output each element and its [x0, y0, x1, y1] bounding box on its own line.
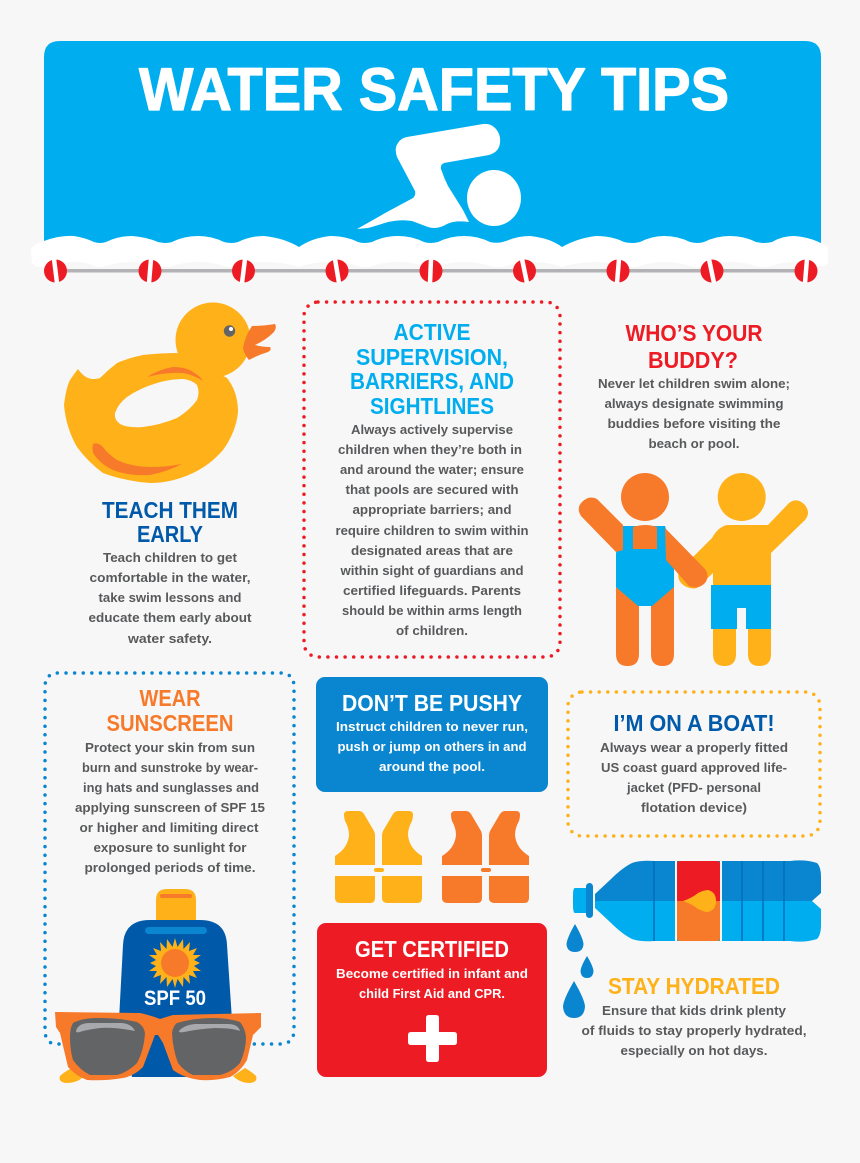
- icon: water drops: [563, 924, 594, 1018]
- header banner: [44, 41, 821, 250]
- text: stay hydrated: of fluids to stay properly hydrated,: [582, 1023, 806, 1038]
- label: [677, 861, 720, 901]
- panel: i'm on a boat: flotation device): [641, 800, 747, 815]
- panel: don't be pushy: around the pool.: [379, 759, 485, 774]
- text: stay hydrated: [582, 973, 806, 1058]
- text: stay hydrated: Ensure that kids drink plenty: [602, 1003, 787, 1018]
- panel: don't be pushy: [316, 677, 548, 792]
- panel: active supervision: require children to swim within: [336, 523, 529, 538]
- sun: [149, 938, 201, 988]
- panel: active supervision: should be within arms length: [342, 603, 522, 618]
- panel: wear sunscreen: burn and sunstroke by wear-: [82, 760, 258, 775]
- lenses: [70, 1018, 145, 1075]
- panel: active supervision: ACTIVE: [394, 319, 470, 345]
- icon: water bottle: [573, 860, 821, 942]
- panel: wear sunscreen: Protect your skin from sun: [85, 740, 255, 755]
- buoys: [44, 259, 818, 283]
- text: who's your buddy: always designate swimming: [604, 396, 784, 411]
- tube: [119, 920, 232, 1077]
- panel: get certified: [317, 923, 547, 1077]
- panel: don't be pushy: DON’T BE PUSHY: [342, 690, 522, 716]
- icon: life jackets: [335, 811, 529, 903]
- panel: active supervision: [304, 302, 560, 657]
- panel: active supervision: SIGHTLINES: [370, 393, 494, 419]
- panel: i'm on a boat: jacket (PFD- personal: [626, 780, 761, 795]
- text: teach them early: take swim lessons and: [98, 590, 242, 605]
- panel: active supervision: BARRIERS, AND: [350, 368, 514, 394]
- panel: wear sunscreen: WEAR: [140, 685, 201, 711]
- panel: active supervision: SUPERVISION,: [356, 344, 508, 370]
- bottle cap: [573, 888, 587, 913]
- text: teach them early: comfortable in the water,: [90, 570, 250, 585]
- title: WATER SAFETY TIPS: [139, 56, 729, 123]
- text: who's your buddy: [598, 320, 790, 451]
- panel: i'm on a boat: US coast guard approved life-: [601, 760, 787, 775]
- waves: [31, 236, 828, 267]
- text: who's your buddy: BUDDY?: [648, 347, 738, 373]
- rope: [55, 269, 805, 272]
- panel: wear sunscreen: or higher and limiting direct: [80, 820, 259, 835]
- icon: first aid cross: [408, 1015, 457, 1062]
- panel: get certified: Become certified in infant and: [336, 966, 528, 981]
- panel: wear sunscreen: applying sunscreen of SPF 15: [75, 800, 265, 815]
- text: teach them early: Teach children to get: [103, 550, 238, 565]
- icon: two children holding hands: [579, 473, 808, 666]
- temple tips: [60, 1068, 84, 1083]
- lens glare: [76, 1023, 135, 1032]
- panel: i'm on a boat: I’M ON A BOAT!: [614, 710, 774, 736]
- panel: get certified: GET CERTIFIED: [355, 936, 509, 962]
- panel: don't be pushy: Instruct children to never run,: [336, 719, 528, 734]
- text: who's your buddy: buddies before visiting the: [608, 416, 780, 431]
- label drop: [683, 890, 716, 912]
- icon: swimmer: [357, 124, 521, 229]
- panel: active supervision: within sight of guardians and: [339, 563, 524, 578]
- icon: sunscreen bottle and sunglasses: SPF 50: [144, 987, 206, 1010]
- panel: active supervision: Always actively supervise: [351, 422, 513, 437]
- icon: rubber duck float: [64, 302, 276, 483]
- panel: active supervision: designated areas that are: [351, 543, 513, 558]
- text: stay hydrated: especially on hot days.: [620, 1043, 768, 1058]
- text: teach them early: [88, 497, 252, 646]
- text: teach them early: EARLY: [137, 521, 203, 547]
- child right: [678, 473, 808, 666]
- panel: wear sunscreen: exposure to sunlight for: [94, 840, 246, 855]
- eye: [224, 325, 235, 337]
- panel: i'm on a boat: Always wear a properly fitted: [600, 740, 788, 755]
- ribs: [654, 861, 784, 941]
- highlights: [147, 367, 203, 381]
- yellow vest: [335, 811, 422, 903]
- upper half: [595, 860, 821, 901]
- frame: [55, 1012, 261, 1080]
- text: who's your buddy: Never let children swim alone;: [598, 376, 790, 391]
- panel: wear sunscreen: [45, 673, 294, 1044]
- panel: active supervision: of children.: [396, 623, 468, 638]
- waves and lane rope: [31, 236, 828, 283]
- beak: [243, 324, 276, 360]
- child left: [579, 473, 708, 666]
- cap: [156, 889, 196, 925]
- panel: active supervision: appropriate barriers; and: [352, 502, 512, 517]
- icon: sunscreen bottle and sunglasses: [55, 889, 261, 1083]
- text: teach them early: water safety.: [127, 631, 212, 646]
- text: who's your buddy: beach or pool.: [648, 436, 740, 451]
- orange vest: [442, 811, 529, 903]
- text: stay hydrated: STAY HYDRATED: [608, 973, 780, 999]
- panel: active supervision: children when they’re both in: [338, 442, 522, 457]
- panel: active supervision: that pools are secured with: [346, 482, 519, 497]
- text: teach them early: educate them early about: [88, 610, 252, 625]
- text: who's your buddy: WHO’S YOUR: [626, 320, 763, 346]
- panel: wear sunscreen: prolonged periods of time.: [84, 860, 256, 875]
- panel: don't be pushy: push or jump on others in and: [338, 739, 527, 754]
- panel: wear sunscreen: ing hats and sunglasses and: [83, 780, 259, 795]
- text: teach them early: TEACH THEM: [102, 497, 238, 523]
- panel: i'm on a boat: [568, 692, 820, 836]
- panel: wear sunscreen: SUNSCREEN: [106, 710, 234, 736]
- lower half: [595, 901, 821, 942]
- panel: active supervision: and around the water; ensure: [340, 462, 524, 477]
- panel: get certified: child First Aid and CPR.: [359, 986, 505, 1001]
- panel: active supervision: certified lifeguards. Parents: [343, 583, 521, 598]
